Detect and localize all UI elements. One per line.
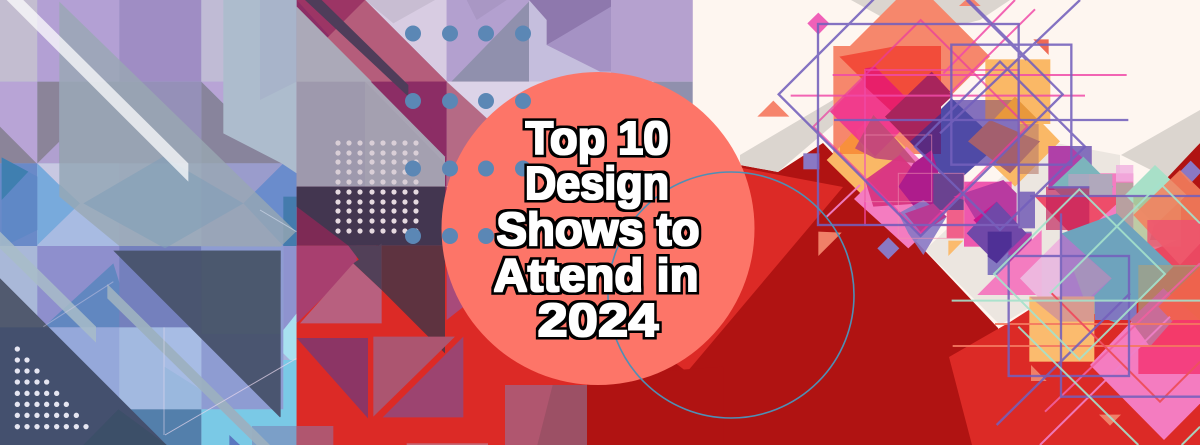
- title: Attend in: [494, 249, 698, 301]
- triangle: rose upper: [300, 263, 382, 323]
- white diagonal stripe: [7, 0, 188, 182]
- dark translucent triangle: [382, 246, 445, 353]
- pink and coral line work: [791, 0, 1200, 445]
- dark stripe: [305, 0, 408, 97]
- rose diagonal band: [297, 0, 447, 187]
- translucent grey band: [59, 2, 296, 247]
- triangle: plum: [383, 337, 463, 417]
- panel: right cream background with red ground: [587, 0, 1200, 445]
- triangle: rose middle: [373, 337, 455, 417]
- rose rectangles: [505, 385, 587, 445]
- triangle: maroon: [297, 338, 368, 418]
- title: Design: [525, 157, 669, 209]
- dark navy block: [297, 187, 445, 246]
- title: Shows to: [496, 203, 700, 255]
- panel: white dot grid: [335, 140, 419, 234]
- panel: centre geometric panel: [297, 0, 723, 445]
- blue dot grid: [405, 26, 531, 244]
- title: Top 10: [526, 112, 668, 164]
- panel: left geometric lavender and slate panel: [0, 0, 297, 445]
- slate triangle: [113, 251, 281, 417]
- lower cluster fills: [977, 213, 1200, 440]
- bright red wedge: [620, 160, 843, 372]
- coral circle: [442, 72, 754, 385]
- title: 2024: [538, 294, 659, 346]
- pale diagonal bands: [0, 232, 96, 343]
- slate lower-left wedge: [0, 278, 167, 445]
- panel: overlapping translucent confetti shapes: [757, 0, 1200, 445]
- magenta and red base: [297, 246, 497, 445]
- mint line work: [952, 183, 1200, 445]
- small accent shapes: [757, 0, 1200, 426]
- white dot triangle: [15, 346, 89, 429]
- middle cluster fills: [1033, 146, 1200, 267]
- purple line work: [779, 0, 1200, 425]
- pale vertical panel: [223, 0, 297, 173]
- thin blue outline circle: [608, 172, 854, 418]
- fine lines: [43, 210, 297, 435]
- upper cluster fills: [827, 0, 1060, 275]
- grey triangle: [297, 7, 445, 187]
- title: [494, 112, 700, 346]
- dark red base right: [587, 367, 723, 445]
